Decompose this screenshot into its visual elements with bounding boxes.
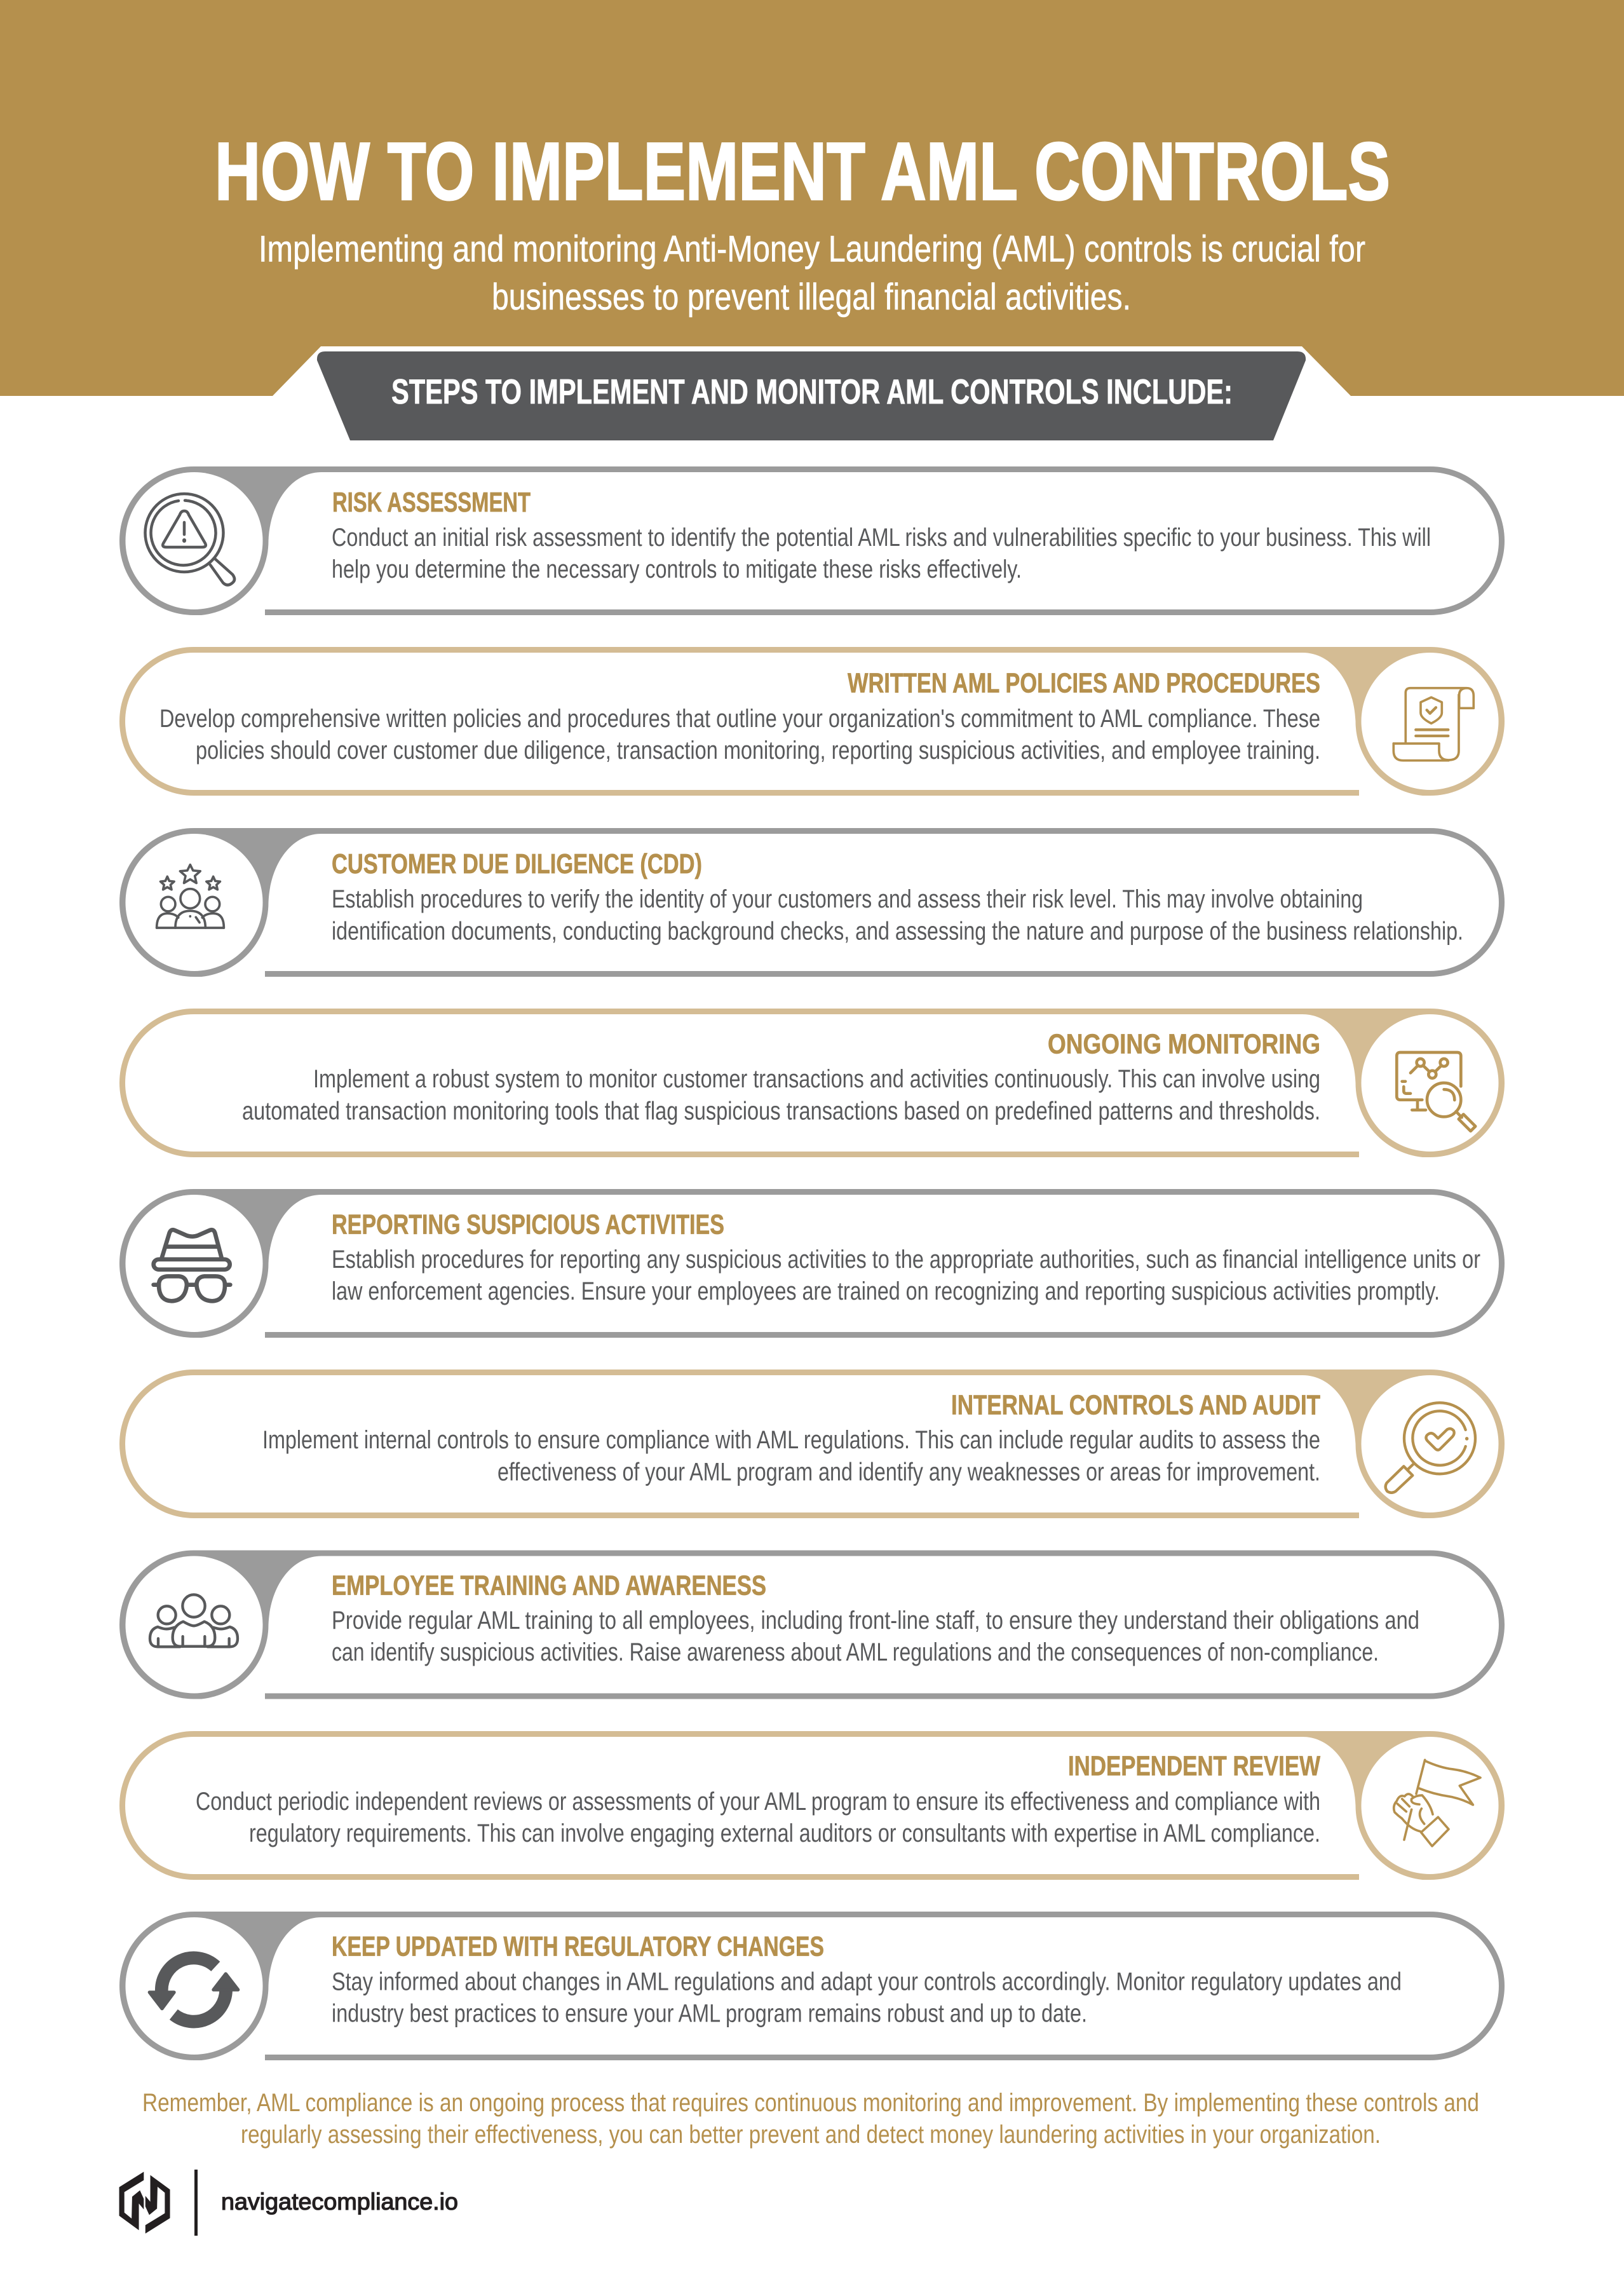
subtitle xyxy=(259,229,1365,318)
heading: RISK ASSESSMENT xyxy=(332,487,531,518)
icon: scroll with shield xyxy=(1393,688,1473,761)
body text: Implement internal controls to ensure compliance with AML regulations. This can include regular audits to assess the xyxy=(262,1426,1320,1454)
section banner xyxy=(317,351,1306,440)
body text: Establish procedures to verify the identity of your customers and assess their risk level. This may involve obtaining xyxy=(332,885,1363,913)
body text xyxy=(332,885,1463,946)
closing note xyxy=(142,2089,1479,2149)
heading: REPORTING SUSPICIOUS ACTIVITIES xyxy=(332,1209,724,1240)
closing note: regularly assessing their effectiveness, you can better prevent and detect money laundering activities in your organization. xyxy=(241,2121,1381,2149)
panel: keep updated xyxy=(119,1912,1505,2060)
body text: Conduct periodic independent reviews or assessments of your AML program to ensure its effectiveness and compliance with xyxy=(196,1788,1320,1816)
heading: INTERNAL CONTROLS AND AUDIT xyxy=(951,1389,1320,1421)
body text xyxy=(159,705,1320,765)
logo: navigate compliance: navigatecompliance.io xyxy=(221,2189,458,2215)
header band xyxy=(0,0,1624,396)
panel: internal controls and audit xyxy=(119,1370,1505,1519)
panel: ongoing monitoring xyxy=(119,1009,1505,1158)
logo: navigate compliance xyxy=(119,2170,458,2236)
icon: customers with stars xyxy=(157,865,224,928)
body text xyxy=(332,1968,1402,2027)
section banner: STEPS TO IMPLEMENT AND MONITOR AML CONTROLS INCLUDE: xyxy=(391,372,1233,411)
heading: KEEP UPDATED WITH REGULATORY CHANGES xyxy=(332,1931,824,1962)
body text xyxy=(262,1426,1320,1486)
panel: risk assessment xyxy=(119,466,1505,615)
heading: ONGOING MONITORING xyxy=(1048,1028,1320,1060)
body text xyxy=(332,1607,1419,1666)
icon: group of employees xyxy=(150,1594,238,1647)
body text: automated transaction monitoring tools that flag suspicious transactions based on predefined patterns and thresholds. xyxy=(242,1097,1320,1125)
subtitle: businesses to prevent illegal financial activities. xyxy=(492,276,1131,318)
body text: Implement a robust system to monitor customer transactions and activities continuously. This can involve using xyxy=(313,1065,1320,1093)
panel: reporting suspicious activities xyxy=(119,1189,1505,1338)
heading: EMPLOYEE TRAINING AND AWARENESS xyxy=(332,1570,766,1601)
body text: regulatory requirements. This can involve engaging external auditors or consultants with expertise in AML compliance. xyxy=(249,1819,1320,1847)
panel: customer due diligence xyxy=(119,828,1505,977)
heading: WRITTEN AML POLICIES AND PROCEDURES xyxy=(848,667,1320,699)
panel: written AML policies xyxy=(119,647,1505,796)
body text: Develop comprehensive written policies and procedures that outline your organization's commitment to AML compliance. These xyxy=(159,705,1320,733)
body text xyxy=(196,1788,1320,1847)
icon: hand holding flag xyxy=(1394,1760,1480,1846)
body text: can identify suspicious activities. Raise awareness about AML regulations and the consequences of non-compliance. xyxy=(332,1638,1379,1666)
icon: refresh arrows xyxy=(149,1958,238,2022)
icon: detective hat and glasses xyxy=(154,1230,230,1301)
body text xyxy=(332,1246,1480,1305)
body text xyxy=(242,1065,1320,1125)
body text: Stay informed about changes in AML regulations and adapt your controls accordingly. Monitor regulatory updates and xyxy=(332,1968,1402,1995)
body text: help you determine the necessary controls to mitigate these risks effectively. xyxy=(332,555,1022,583)
subtitle: Implementing and monitoring Anti-Money Laundering (AML) controls is crucial for xyxy=(259,229,1365,269)
panel: employee training xyxy=(119,1551,1505,1699)
heading: INDEPENDENT REVIEW xyxy=(1068,1750,1320,1782)
body text: policies should cover customer due diligence, transaction monitoring, reporting suspicious activities, and employee training. xyxy=(196,737,1320,765)
body text xyxy=(332,524,1431,583)
icon: magnifier with warning triangle xyxy=(145,494,234,585)
heading: CUSTOMER DUE DILIGENCE (CDD) xyxy=(332,848,702,880)
panel: independent review xyxy=(119,1731,1505,1880)
icon: magnifier with check xyxy=(1386,1403,1475,1493)
body text: Provide regular AML training to all employees, including front-line staff, to ensure they understand their obligations and xyxy=(332,1607,1419,1635)
icon: monitor with magnifier xyxy=(1397,1052,1475,1131)
body text: industry best practices to ensure your AML program remains robust and up to date. xyxy=(332,1999,1087,2027)
body text: effectiveness of your AML program and identify any weaknesses or areas for improvement. xyxy=(497,1458,1320,1486)
